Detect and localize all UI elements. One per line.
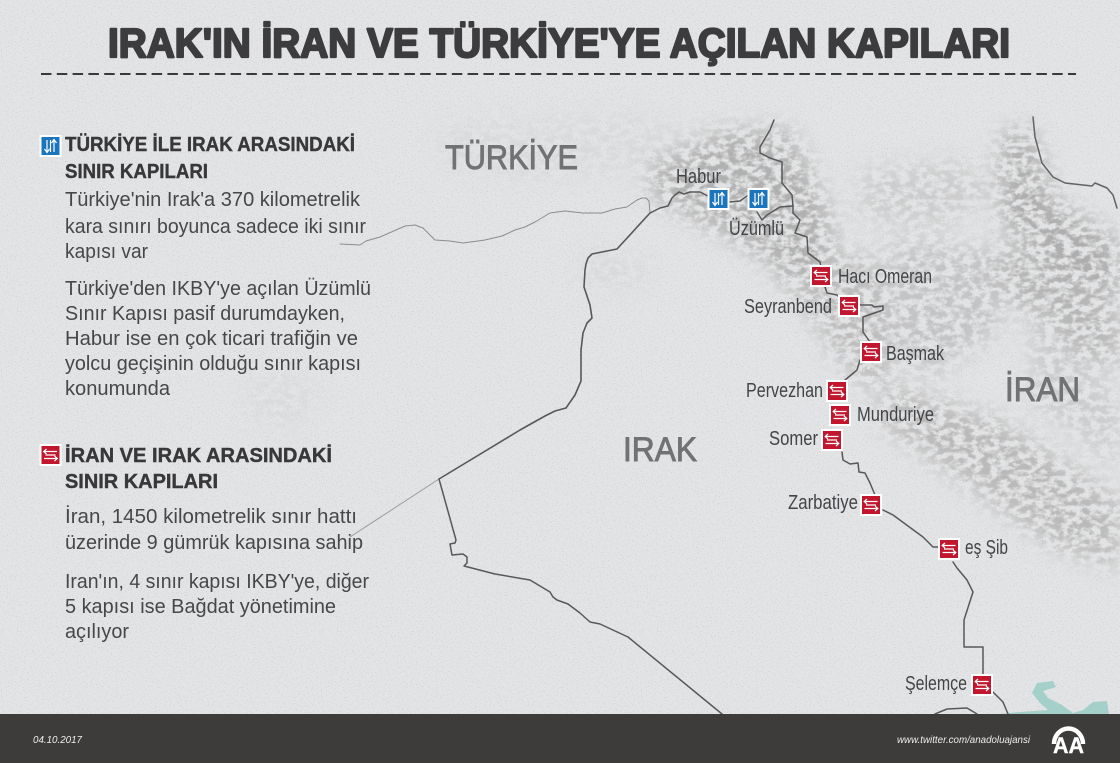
border: Ürdün-Suriye thin: [350, 479, 439, 537]
text block: 1450 km border: [65, 505, 363, 554]
logo: Anadolu Agency: AA: [1053, 733, 1084, 758]
border: Türkiye-Irak west: [650, 192, 708, 213]
border: Hacı Omeran-Seyranbend: [825, 287, 841, 299]
text block: gate distribution: açılıyor: [65, 621, 129, 643]
country label: Türkiye: TÜRKİYE: [445, 139, 578, 177]
icon: blue gate legend: [40, 135, 62, 157]
text block: 370 km border: [65, 189, 366, 263]
gate: Şelemçe: Şelemçe: [905, 673, 967, 695]
text block: Üzümlü and Habur: Habur ise en çok ticari trafiğin ve: [65, 328, 358, 350]
heading: Türkiye-Irak gates: TÜRKİYE İLE IRAK ARASINDAKİ: [65, 133, 355, 156]
border: south of Şelemçe: [993, 692, 1008, 714]
footer bar: [0, 714, 1120, 763]
text block: 1450 km border: İran, 1450 kilometrelik sınır hattı: [65, 505, 357, 528]
gate: Munduriye: Munduriye: [857, 404, 934, 426]
country label: İran: İRAN: [1005, 371, 1080, 409]
border: Zarbatiye-eş Şib: [883, 510, 938, 547]
text block: Üzümlü and Habur: konumunda: [65, 378, 171, 400]
heading: İran-Irak gates: [65, 444, 332, 493]
gate: Hacı Omeran: [810, 265, 932, 288]
border: İran-Azerbaycan: [1033, 117, 1117, 208]
gate: Üzümlü: Üzümlü: [729, 218, 784, 240]
gate: Munduriye: [829, 404, 934, 426]
gate: Habur: Habur: [676, 166, 721, 188]
border: Kuwait: [935, 708, 977, 714]
heading: İran-Irak gates: İRAN VE IRAK ARASINDAKİ: [65, 444, 332, 467]
border: Ürdün-Suudi Arabistan-Irak: [439, 479, 722, 714]
text block: 370 km border: kapısı var: [65, 241, 148, 263]
icon: red gate legend: [40, 444, 62, 466]
gate: Seyranbend: Seyranbend: [744, 296, 832, 318]
dashed divider: [41, 73, 1076, 75]
terrain relief: [250, 112, 1120, 570]
gate: Üzümlü: [729, 188, 784, 240]
text block: Üzümlü and Habur: Sınır Kapısı pasif durumdayken,: [65, 303, 345, 325]
text block: Üzümlü and Habur: yolcu geçişinin olduğu sınır kapısı: [65, 353, 361, 375]
border: Türkiye-Suriye: [340, 198, 650, 245]
text block: 1450 km border: üzerinde 9 gümrük kapısına sahip: [65, 532, 363, 554]
border: eş Şib-Şelemçe: [953, 562, 983, 675]
border: Suriye-Irak: [439, 213, 650, 479]
text block: gate distribution: 5 kapısı ise Bağdat yönetimine: [65, 596, 336, 618]
gate: Başmak: Başmak: [886, 343, 945, 365]
twitter url: www.twitter.com/anadoluajansi: [897, 734, 1031, 746]
border: Somer-Zarbatiye: [842, 452, 875, 495]
gate: Somer: Somer: [769, 428, 818, 450]
heading: Türkiye-Irak gates: [65, 133, 355, 183]
text block: 370 km border: Türkiye'nin Irak'a 370 kilometrelik: [65, 189, 361, 211]
text block: gate distribution: [65, 571, 369, 643]
panel: İran-Irak text: [40, 444, 369, 643]
country label: Irak: IRAK: [623, 431, 697, 469]
text block: gate distribution: Iran'ın, 4 sınır kapısı IKBY'ye, diğer: [65, 571, 369, 593]
gate: Zarbatiye: Zarbatiye: [788, 492, 858, 514]
border: Başmak-Pervezhan: [845, 360, 860, 380]
text block: 370 km border: kara sınırı boyunca sadece iki sınır: [65, 216, 366, 238]
water: gulf: [1000, 681, 1109, 714]
gate: eş Şib: [938, 537, 1008, 560]
gate: Habur: [676, 166, 730, 210]
border: Türkiye-İran: [760, 120, 821, 268]
gate: Pervezhan: Pervezhan: [746, 380, 823, 402]
text block: Üzümlü and Habur: [65, 278, 371, 400]
border: Habur-Üzümlü: [729, 196, 747, 202]
title: IRAK'IN İRAN VE TÜRKİYE'YE AÇILAN KAPILARI: [108, 20, 1010, 66]
gate: Hacı Omeran: Hacı Omeran: [838, 266, 932, 288]
country borders: [340, 117, 1117, 714]
gate: eş Şib: eş Şib: [965, 537, 1008, 559]
border: Üzümlü east: [757, 206, 793, 220]
text block: Üzümlü and Habur: Türkiye'den IKBY'ye açılan Üzümlü: [65, 278, 371, 300]
date: 04.10.2017: [33, 734, 83, 746]
heading: İran-Irak gates: SINIR KAPILARI: [65, 470, 218, 493]
heading: Türkiye-Irak gates: SINIR KAPILARI: [65, 160, 208, 183]
panel: Türkiye-Irak text: [40, 133, 371, 400]
gate: Başmak: [860, 341, 945, 365]
border: Seyranbend-Başmak: [860, 305, 883, 342]
